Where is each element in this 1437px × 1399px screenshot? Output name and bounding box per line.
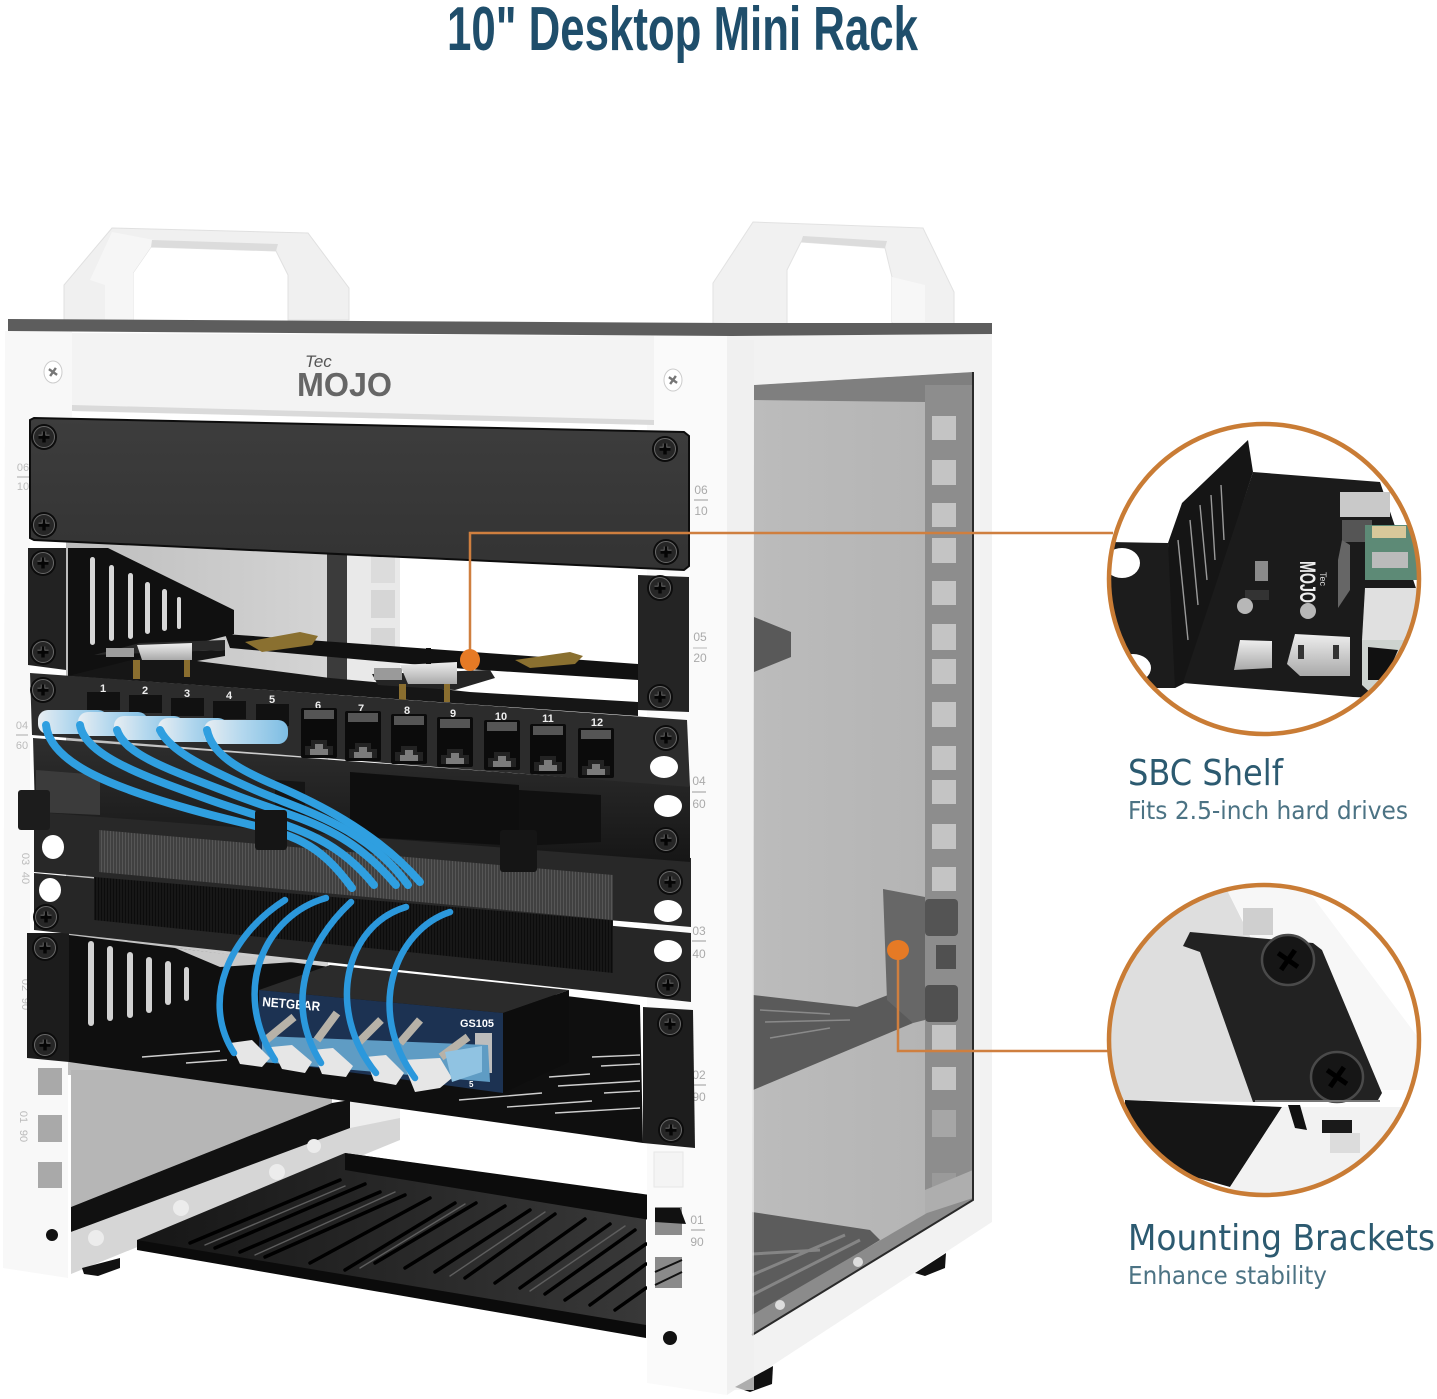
- Netgear GS105 switch: 5: [469, 1080, 474, 1089]
- patch panel: 6: [315, 700, 321, 712]
- lower brush panel: [33, 868, 691, 1002]
- detail circle: SBC shelf: [1104, 423, 1425, 735]
- logo: Tec MOJO: Tec: [305, 352, 332, 371]
- blank rack panel: [30, 418, 689, 570]
- rack unit scale labels right: 05: [693, 630, 707, 644]
- circle ring: [1109, 885, 1419, 1195]
- patch panel: 3: [184, 688, 190, 700]
- detail circle: mounting brackets: [1105, 880, 1420, 1200]
- patch panel: 5: [269, 694, 275, 706]
- SBC shelf label: SBC Shelf: [1128, 753, 1284, 794]
- patch panel: 8: [404, 705, 410, 717]
- callout line: SBC shelf: [460, 533, 1113, 671]
- mounting brackets label: Enhance stability: [1128, 1261, 1327, 1290]
- upper SBC shelf: [28, 548, 689, 716]
- RJ45 plugs on patch panel: [38, 710, 288, 744]
- rack feet left: [82, 1258, 120, 1276]
- upper brush panel: [34, 806, 691, 927]
- patch panel: 2: [142, 685, 148, 697]
- rack unit scale labels left: 02: [19, 979, 31, 991]
- callout line: mounting brackets: [887, 940, 1108, 1051]
- rack unit scale labels right: 01: [690, 1213, 704, 1227]
- bottom left side rail: [71, 1098, 400, 1274]
- rack unit scale labels right: 40: [692, 947, 706, 961]
- patch panel: 7: [358, 703, 364, 715]
- front left post: [3, 331, 72, 1278]
- patch panel: 9: [450, 708, 456, 720]
- bottom shelf: [137, 1153, 650, 1338]
- rack unit scale labels right: [690, 483, 708, 1249]
- rack unit scale labels left: 40: [19, 872, 31, 884]
- patch panel: [30, 673, 690, 787]
- patch panel: 11: [542, 713, 554, 725]
- Netgear GS105 switch: NETGEAR: [262, 994, 321, 1014]
- rack unit scale labels right: 03: [692, 924, 706, 938]
- SBC logo: [1300, 562, 1326, 602]
- SBC logo: MOJO: [1295, 561, 1320, 603]
- side frame: [727, 334, 992, 1395]
- patch panel: 12: [591, 717, 603, 729]
- rear view through rack: [66, 540, 400, 1207]
- cable manager row: [18, 738, 690, 862]
- logo: Tec MOJO: MOJO: [297, 366, 392, 403]
- patch panel: 10: [495, 711, 507, 723]
- SBC logo: Tec: [1318, 572, 1328, 587]
- side glass window: [750, 370, 976, 1340]
- rack unit scale labels left: 90: [17, 1130, 29, 1142]
- rack unit scale labels right: 60: [692, 797, 706, 811]
- right carrying handle: [713, 222, 954, 324]
- logo panel: [44, 333, 682, 425]
- rack unit scale labels left: 90: [19, 998, 31, 1010]
- glass edge: [752, 372, 973, 1335]
- lower SBC shelf: [27, 933, 695, 1148]
- blue patch cables lower bundle: [220, 898, 450, 1078]
- rack unit scale labels right: 06: [694, 483, 708, 497]
- rack unit scale labels right: 90: [692, 1090, 706, 1104]
- patch panel: 1: [100, 683, 106, 695]
- blue patch cables upper bundle: [46, 725, 420, 888]
- Netgear GS105 switch: GS105: [460, 1018, 494, 1030]
- switch ports with plugs: [230, 1013, 490, 1092]
- rack unit scale labels right: 04: [692, 774, 706, 788]
- frame screws: [44, 361, 682, 391]
- rack unit scale labels left: [16, 462, 31, 1142]
- SBC shelf label: Fits 2.5-inch hard drives: [1128, 796, 1408, 825]
- rack feet right: [735, 1253, 946, 1392]
- rack unit scale labels left: 60: [16, 740, 28, 752]
- rack unit scale labels right: 02: [692, 1068, 706, 1082]
- rack product illustration: [3, 222, 992, 1395]
- patch panel: 4: [226, 690, 233, 702]
- left carrying handle: [64, 228, 349, 320]
- rack unit scale labels left: 06: [17, 462, 29, 474]
- middle cable clip: [255, 810, 287, 850]
- circle ring: [1109, 424, 1419, 734]
- cable clips: [275, 780, 537, 872]
- rack unit scale labels right: 10: [694, 504, 708, 518]
- front right post: [647, 336, 754, 1395]
- rack unit scale labels right: 20: [693, 651, 707, 665]
- rack unit scale labels left: 10: [17, 481, 29, 493]
- mounting brackets label: [1128, 1218, 1435, 1290]
- top plate: [8, 319, 992, 336]
- Netgear GS105 switch: [230, 965, 569, 1093]
- rack unit scale labels right: 90: [690, 1235, 704, 1249]
- SBC connectors: [94, 632, 583, 702]
- rack unit scale labels left: 03: [19, 853, 31, 865]
- SBC shelf label: [1128, 753, 1408, 825]
- rack unit scale labels left: 01: [17, 1111, 29, 1123]
- rack unit scale labels left: 04: [16, 720, 28, 732]
